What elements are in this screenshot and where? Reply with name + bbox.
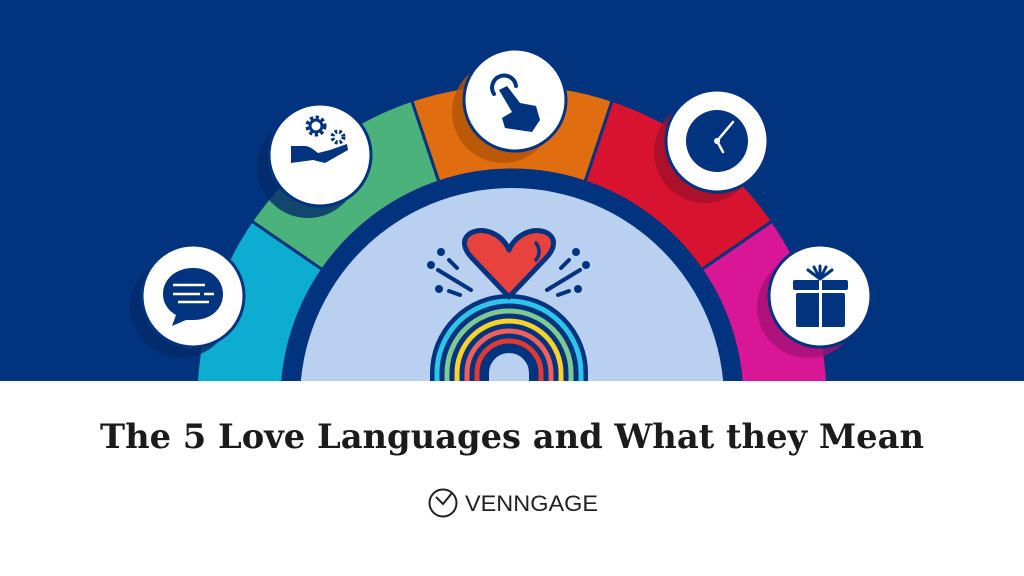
segment: cyan — [196, 221, 322, 414]
icon: heart — [464, 231, 554, 297]
icon: rainbow — [437, 301, 581, 395]
sparks — [429, 250, 588, 295]
icon: gift (receiving gifts) — [757, 245, 871, 358]
segment: red — [585, 100, 772, 270]
background top — [0, 0, 1024, 381]
logo: venngage: VENNGAGE — [465, 491, 598, 516]
icon: hand with gears (acts of service) — [257, 104, 371, 218]
icon: chat bubble (words of affirmation) — [130, 245, 244, 358]
logo: venngage — [430, 490, 598, 516]
segment: magenta — [702, 221, 828, 414]
segment: green — [252, 100, 439, 270]
icon: clock (quality time) — [654, 90, 768, 203]
semicircle arc of colored segments — [196, 84, 828, 414]
white bottom — [0, 381, 1024, 576]
segment: orange — [412, 84, 612, 182]
inner ring and light center — [281, 169, 743, 576]
icon: touching hand (physical touch) — [452, 49, 566, 163]
title: The 5 Love Languages and What they Mean — [100, 417, 924, 457]
